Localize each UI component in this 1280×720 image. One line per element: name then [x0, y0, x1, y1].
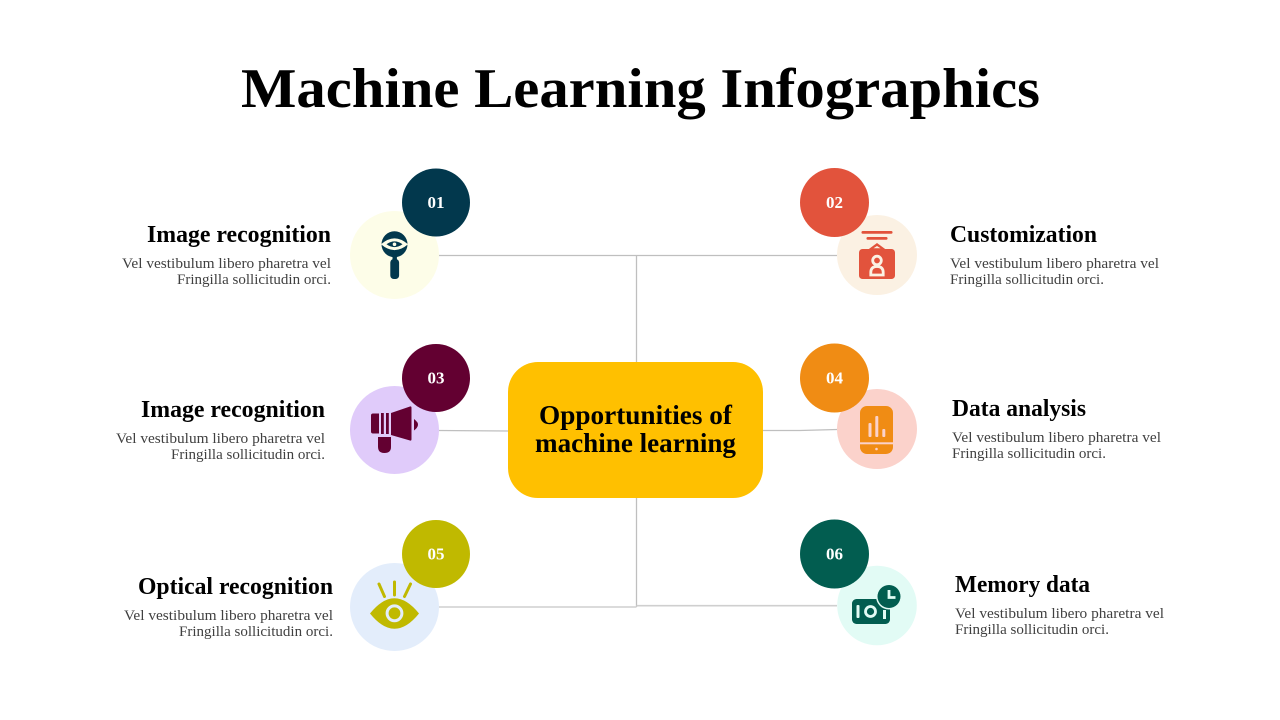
heading and description [955, 572, 1164, 638]
heading and description: Fringilla sollicitudin orci. [952, 446, 1106, 462]
heading and description: Fringilla sollicitudin orci. [955, 622, 1109, 638]
badge 03: 03 [428, 368, 444, 388]
heading and description [952, 396, 1161, 462]
heading and description [950, 222, 1159, 288]
heading and description: Fringilla sollicitudin orci. [171, 447, 325, 463]
item 05: optical recognition [124, 520, 470, 651]
central box: opportunities: Opportunities of [539, 399, 733, 430]
icon: megaphone [371, 406, 418, 453]
badge 04: 04 [826, 368, 844, 388]
icon: eye with lashes [370, 582, 419, 629]
heading and description: Fringilla sollicitudin orci. [177, 272, 331, 288]
icon: id badge [859, 231, 895, 279]
icon: memory chip with clock [852, 584, 902, 624]
heading and description [116, 397, 325, 463]
badge 01: 01 [428, 193, 444, 212]
item 01: image recognition [122, 168, 470, 299]
badge 05 [402, 520, 470, 588]
badge 06: 06 [826, 544, 843, 564]
heading and description: Vel vestibulum libero pharetra vel [124, 608, 333, 624]
central box: opportunities: machine learning [535, 427, 736, 458]
heading and description: Fringilla sollicitudin orci. [179, 624, 333, 640]
heading and description [122, 222, 331, 288]
item 02: customization [800, 168, 1159, 295]
badge 06 [800, 520, 869, 588]
badge 02: 02 [826, 193, 843, 212]
badge 03 [402, 344, 470, 412]
heading and description: Vel vestibulum libero pharetra vel [955, 606, 1164, 622]
connector lines [439, 256, 837, 607]
item 03: image recognition [116, 344, 470, 474]
heading and description: Optical recognition [138, 574, 333, 600]
badge 04 [800, 344, 869, 412]
heading and description: Memory data [955, 572, 1090, 598]
badge 02 [800, 168, 869, 237]
central box: opportunities [508, 362, 763, 498]
heading and description: Vel vestibulum libero pharetra vel [950, 256, 1159, 272]
heading and description: Fringilla sollicitudin orci. [950, 272, 1104, 288]
heading and description: Data analysis [952, 396, 1086, 422]
heading and description: Vel vestibulum libero pharetra vel [952, 430, 1161, 446]
heading and description: Image recognition [147, 222, 331, 248]
badge 01 [402, 168, 470, 236]
title: Machine Learning Infographics [241, 58, 1040, 120]
heading and description: Customization [950, 222, 1097, 248]
heading and description: Vel vestibulum libero pharetra vel [122, 256, 331, 272]
icon: phone with bars [860, 406, 893, 454]
heading and description: Vel vestibulum libero pharetra vel [116, 431, 325, 447]
heading and description: Image recognition [141, 397, 325, 423]
item 04: data analysis [800, 344, 1161, 469]
heading and description [124, 574, 333, 640]
icon: magnifier with eye [381, 231, 408, 279]
badge 05: 05 [428, 544, 444, 564]
item 06: memory data [800, 520, 1164, 645]
